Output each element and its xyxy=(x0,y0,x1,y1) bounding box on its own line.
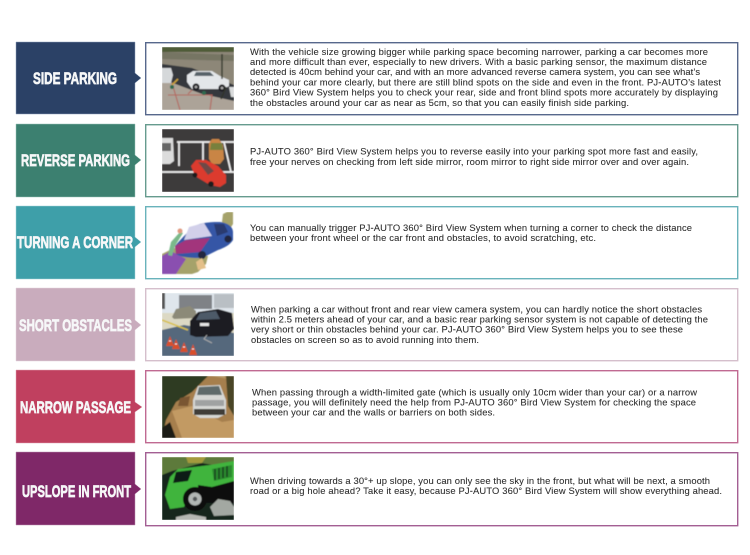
description: upslope in front: When driving towards a 30°+ up slope, you can only see the sky in the front, but what will be next, a smooth xyxy=(250,475,710,486)
heading block: short obstacles: SHORT OBSTACLES xyxy=(19,317,132,335)
content box: reverse parking xyxy=(146,125,738,197)
description: side parking: behind your car more clearly, but there are still blind spots on the side and even in the front. PJ-AUTO’s latest xyxy=(250,76,721,87)
photo: white SUV parking beside kerb xyxy=(162,47,234,110)
photo: green jeep climbing a rocky slope xyxy=(162,457,234,520)
description: turning a corner: You can manually trigger PJ-AUTO 360° Bird View System when turning a corner to check the distance xyxy=(250,222,692,233)
panel: reverse parking xyxy=(16,124,738,197)
description: narrow passage: between your car and the walls or barriers on both sides. xyxy=(252,407,495,418)
content box: short obstacles xyxy=(146,289,738,361)
description: reverse parking: free your nerves on checking from left side mirror, room mirror to right side mirror over and over again. xyxy=(250,156,689,167)
description: short obstacles: When parking a car without front and rear view camera system, you can hardly notice the short obstacles xyxy=(251,304,702,314)
heading block: upslope in front: UPSLOPE IN FRONT xyxy=(22,483,131,501)
description: narrow passage xyxy=(252,386,697,418)
panel: upslope in front xyxy=(16,452,738,526)
content box: upslope in front xyxy=(146,453,738,526)
heading block: upslope in front xyxy=(16,452,141,525)
description: short obstacles: very short or thin obstacles behind your car. PJ-AUTO 360° Bird View System helps you to see these xyxy=(251,324,683,335)
illustration: blue car turning a corner with guides xyxy=(162,212,233,274)
heading block: narrow passage: NARROW PASSAGE xyxy=(20,399,131,417)
heading block: turning a corner xyxy=(16,206,141,279)
panel: short obstacles xyxy=(16,288,738,361)
description: turning a corner xyxy=(250,222,692,243)
description: narrow passage: passage, you will definitely need the help from PJ-AUTO 360° Bird View System for checking the space xyxy=(252,397,696,408)
content box: side parking xyxy=(146,43,738,115)
description: reverse parking xyxy=(250,146,698,167)
description: side parking xyxy=(250,46,721,108)
photo: red car reversing into parking bay xyxy=(162,129,234,192)
description: upslope in front xyxy=(250,475,722,496)
content box: turning a corner xyxy=(146,207,738,279)
panel: turning a corner xyxy=(16,206,738,279)
description: side parking: With the vehicle size growing bigger while parking space becoming narrower, parking a car becomes more xyxy=(250,46,708,57)
panel: narrow passage xyxy=(16,370,738,443)
description: upslope in front: road or a big hole ahead? Take it easy, because PJ-AUTO 360° Bird View System will show everything ahead. xyxy=(250,485,722,496)
heading block: turning a corner: TURNING A CORNER xyxy=(17,234,133,252)
description: short obstacles: obstacles on screen so as to avoid running into them. xyxy=(251,334,479,345)
heading block: reverse parking xyxy=(16,124,141,197)
description: turning a corner: between your front wheel or the car front and obstacles, to avoid scratching, etc. xyxy=(250,232,596,243)
content box: narrow passage xyxy=(146,371,738,443)
panel: side parking xyxy=(16,42,738,115)
heading block: side parking: SIDE PARKING xyxy=(33,70,117,88)
description: side parking: detected is 40cm behind your car, and with an more advanced reverse camera system, you can see what’s xyxy=(250,66,700,77)
description: narrow passage: When passing through a width-limited gate (which is usually only 10cm wider than your car) or a narrow xyxy=(252,386,697,398)
description: reverse parking: PJ-AUTO 360° Bird View System helps you to reverse easily into your parking spot more fast and easily, xyxy=(250,146,698,156)
heading block: narrow passage xyxy=(16,370,142,443)
photo: white truck on a narrow dirt track xyxy=(162,376,234,438)
heading block: short obstacles xyxy=(16,288,141,361)
description: short obstacles: within 2.5 meters ahead of your car, and a basic rear parking sensor system is not capable of detecting the xyxy=(250,314,708,325)
heading block: reverse parking: REVERSE PARKING xyxy=(21,152,130,170)
description: side parking: and more difficult than ever, especially to new drivers. With a basic parking sensor, the maximum distance xyxy=(250,56,707,67)
photo: dark car reversing towards traffic cones xyxy=(162,293,234,356)
description: side parking: the obstacles around your car as near as 5cm, so that you can easily finish side parking. xyxy=(250,97,629,108)
description: short obstacles xyxy=(250,304,708,345)
description: side parking: 360° Bird View System helps you to check your rear, side and front blind spots more accurately by displaying xyxy=(250,87,718,98)
heading block: side parking xyxy=(16,42,141,114)
